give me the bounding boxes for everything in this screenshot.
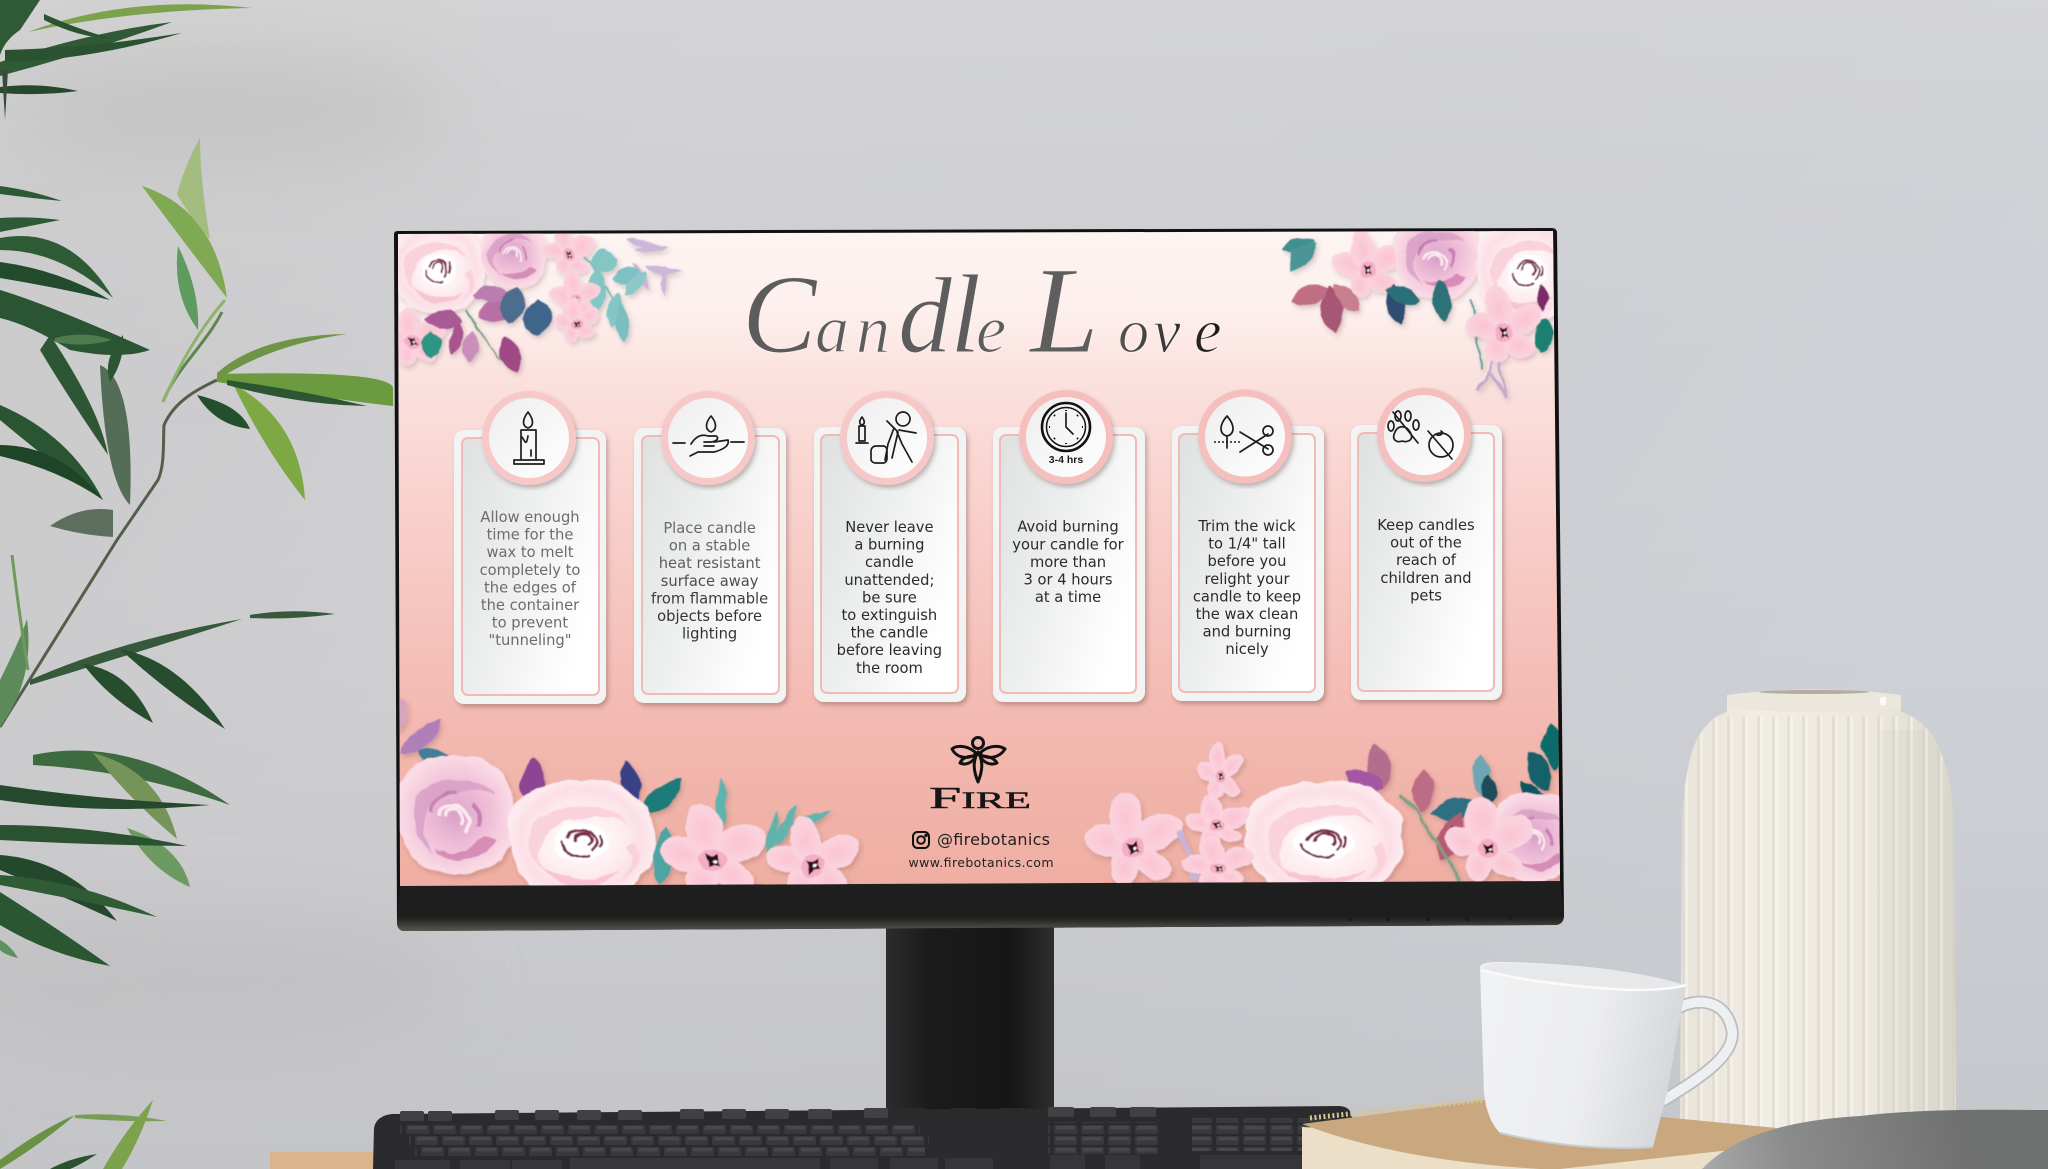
title: o	[1118, 298, 1149, 366]
brand name: F IRE	[929, 780, 1031, 815]
icon: clock 3-4 hrs	[1022, 394, 1110, 480]
florals: top left	[398, 234, 683, 376]
florals: bottom left	[399, 697, 862, 886]
step text: Place candle	[663, 520, 756, 537]
icon: clock 3-4 hrs: 3-4 hrs	[1049, 454, 1083, 466]
step text: out of the	[1390, 535, 1462, 552]
step text: to extinguish	[842, 607, 937, 624]
step text: pets	[1410, 587, 1442, 604]
step text: to prevent	[492, 615, 568, 632]
title: e	[1194, 298, 1222, 366]
plant top leaves	[0, 0, 252, 537]
title: e	[976, 291, 1006, 367]
icon: hand holding candle	[664, 394, 752, 482]
card 3	[814, 394, 966, 702]
panel: screen infographic	[380, 214, 1580, 899]
card 1	[454, 394, 606, 704]
plant lower leaves	[0, 555, 335, 966]
icon: no pets and no children	[1380, 392, 1468, 478]
step text: wax to melt	[487, 544, 574, 561]
plant bottom leaves	[0, 1100, 167, 1169]
step text: on a stable	[669, 538, 750, 555]
step text: your candle for	[1012, 536, 1125, 553]
florals: top right	[1281, 231, 1554, 402]
step text: time for the	[487, 527, 573, 544]
title: l	[950, 253, 981, 377]
step text: from flammable	[651, 590, 768, 607]
step text: the room	[856, 660, 923, 677]
step text: before leaving	[837, 642, 942, 659]
step text: nicely	[1225, 641, 1269, 658]
step text: 3 or 4 hours	[1023, 572, 1113, 588]
title: n	[856, 291, 890, 367]
step text: the edges of	[484, 579, 577, 596]
notebook	[1302, 1100, 1777, 1169]
step text: the candle	[851, 625, 928, 642]
step text: surface away	[661, 573, 759, 590]
step text: and burning	[1203, 624, 1291, 641]
step text: children and	[1380, 570, 1472, 587]
step text: "tunneling"	[488, 632, 572, 649]
card 6	[1351, 392, 1502, 700]
vase	[1680, 690, 1960, 1136]
icon: instagram	[913, 832, 929, 848]
step text: heat resistant	[659, 555, 761, 572]
icon: person leaving candle	[844, 394, 930, 482]
step text: candle to keep	[1193, 588, 1301, 605]
card 4	[993, 394, 1145, 702]
step text: relight your	[1204, 571, 1290, 588]
website: www.firebotanics.com	[908, 855, 1054, 870]
step text: candle	[865, 554, 914, 571]
monitor	[380, 214, 1580, 1115]
card 2	[634, 394, 786, 703]
icon: candle	[486, 394, 572, 482]
step text: a burning	[854, 537, 924, 554]
instagram handle: @firebotanics	[937, 830, 1050, 849]
monitor stand	[886, 925, 1054, 1115]
step text: lighting	[682, 626, 737, 643]
title: L	[1028, 242, 1099, 379]
step text: be sure	[862, 589, 917, 606]
step text: Allow enough	[480, 509, 580, 526]
title: d	[898, 257, 953, 376]
title: C	[742, 253, 818, 377]
step text: the container	[481, 597, 580, 614]
step text: before you	[1208, 553, 1286, 570]
title: v	[1153, 298, 1181, 366]
title: a	[815, 291, 849, 367]
pillow	[1702, 1110, 2048, 1169]
step text: completely to	[480, 562, 580, 579]
plant upper leaves	[142, 138, 393, 500]
step text: objects before	[657, 608, 762, 625]
step text: the wax clean	[1196, 606, 1298, 623]
step text: more than	[1030, 554, 1106, 571]
keyboard	[373, 1106, 1360, 1169]
step text: Trim the wick	[1197, 518, 1296, 535]
card 5	[1172, 393, 1324, 701]
wood table	[270, 1152, 390, 1169]
plant: bamboo leaves	[0, 0, 393, 1169]
step text: Never leave	[845, 519, 934, 536]
step text: Keep candles	[1377, 517, 1475, 534]
step text: unattended;	[844, 572, 934, 589]
icon: trim wick with scissors	[1202, 393, 1288, 480]
step text: to 1/4" tall	[1208, 536, 1286, 553]
step text: reach of	[1396, 552, 1457, 569]
logo: Fire butterfly mark	[952, 738, 1005, 782]
monitor bezel	[394, 228, 1564, 931]
mug	[1480, 962, 1732, 1148]
step text: at a time	[1035, 589, 1101, 606]
florals: bottom right	[1084, 722, 1560, 883]
step text: Avoid burning	[1017, 519, 1119, 536]
